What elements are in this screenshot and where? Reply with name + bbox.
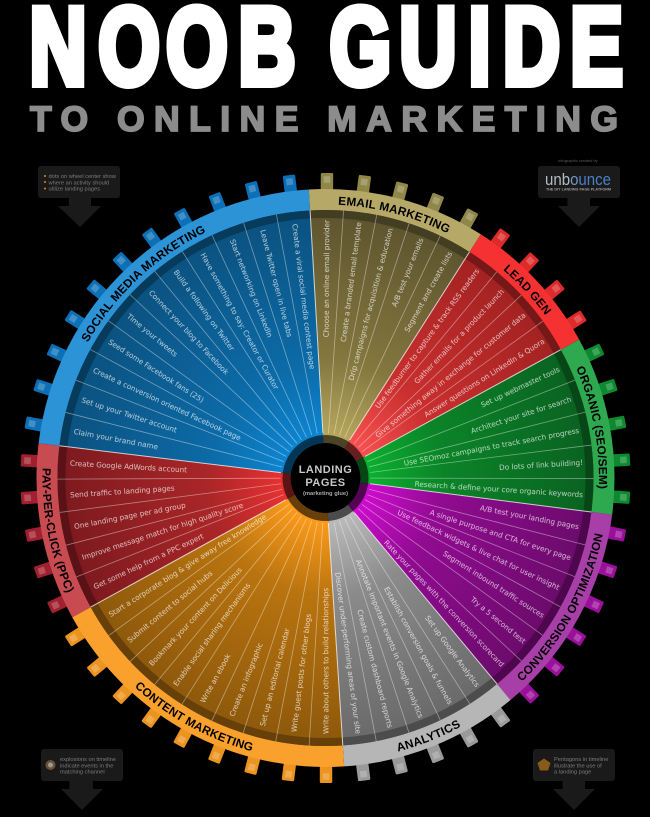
callout: unbounce credit: unbounce [545, 170, 611, 189]
callout: explosions legend: matching channel [60, 770, 105, 776]
content label: Set up an editorial calendar [258, 627, 292, 727]
lead gen label: Gather emails for a product launch [412, 287, 506, 386]
band: email [309, 189, 481, 252]
slice: social [59, 210, 326, 478]
callout: pentagons legend: Pentagons in timeline [554, 757, 608, 763]
content label: Submit content to social hubs [125, 569, 215, 645]
callout: pentagons legend: a landing page [554, 770, 591, 776]
social label: Time your tweets [124, 311, 180, 359]
organic label: Set up webmaster tools [479, 365, 561, 409]
panel: content marketing [65, 495, 344, 783]
social label: Build a following on Twitter [172, 268, 236, 352]
callout: pentagons legend: illustrate the use of [554, 763, 602, 769]
heading: analytics: ANALYTICS [398, 720, 460, 752]
social label: Start networking on LinkedIn [228, 238, 274, 339]
ppc label: Get some help from a PPC expert [92, 531, 205, 591]
band: ppc [36, 443, 91, 617]
band: analytics [343, 684, 510, 766]
analytics label: Annotate important events in Google Analytics [354, 558, 425, 719]
content label: Enable social sharing mechanisms [171, 581, 252, 688]
band: social [39, 189, 310, 446]
slice: lead gen [326, 252, 561, 478]
band: conversion [497, 512, 612, 700]
timeline tabs: social [24, 174, 297, 432]
ppc label: One landing page per ad group [73, 501, 187, 531]
callout: dots legend: utilize landing pages [48, 186, 100, 192]
panel: conversion optimization [348, 482, 626, 704]
hub title: PAGES [305, 477, 346, 489]
conversion label: Use feedback widgets & live chat for user insight [396, 508, 561, 592]
timeline tabs: email [321, 173, 478, 229]
ppc label: Send traffic to landing pages [70, 484, 175, 500]
heading: organic: ORGANIC (SEO/SEM) [577, 366, 608, 488]
callout: unbounce credit: infographic created by [558, 158, 598, 163]
heading: lead gen: LEAD GEN [504, 264, 552, 315]
panel: email marketing [308, 173, 481, 448]
social label: Set up your Twitter account [80, 395, 178, 435]
callout: pentagons legend [533, 749, 615, 810]
conversion label: Try a 5 second test [468, 594, 528, 646]
callout: explosions legend: explosions on timeline [60, 757, 116, 763]
content label: Create an infographic [227, 641, 265, 718]
analytics label: Establish conversion goals & funnels [382, 585, 455, 706]
center hub [286, 439, 364, 517]
slice: email [310, 210, 470, 478]
callout: explosions legend [41, 749, 123, 810]
timeline tabs: conversion [519, 526, 626, 704]
panel: lead gen [344, 228, 586, 462]
social label: Seed some Facebook fans (25) [107, 337, 206, 405]
timeline tabs: organic [584, 343, 630, 504]
analytics label: Set up Google Analytics [423, 614, 482, 689]
hub subtitle: (marketing glue) [303, 491, 348, 497]
slice: conversion [326, 478, 591, 684]
organic label: Architect your site for search [470, 395, 572, 435]
email label: Create a branded email template [339, 221, 363, 343]
content label: Write an ebook [198, 651, 233, 705]
heading: email: EMAIL MARKETING [338, 196, 450, 232]
content label: Write about others to build relationships [321, 588, 330, 734]
slice: ppc [57, 446, 326, 607]
subtitle: TO ONLINE MARKETING [30, 99, 618, 139]
hub title: LANDING [299, 464, 352, 476]
timeline tabs: ppc [21, 454, 68, 614]
panel: analytics [328, 504, 510, 782]
activity labels [70, 220, 583, 735]
social label: Create a viral social media contest page [290, 223, 317, 370]
callout: unbounce credit [538, 158, 620, 227]
timeline tabs: content [65, 627, 332, 783]
callout: unbounce credit: THE DIY LANDING PAGE PLATFORM [546, 186, 612, 192]
organic label: Research & define your core organic keywords [414, 479, 583, 499]
panel: social media marketing [24, 174, 324, 474]
conversion label: Segment inbound traffic sources [441, 549, 546, 620]
panel: pay-per-click [20, 443, 295, 618]
social label: Leave Twitter open in live tabs [258, 229, 294, 338]
lead gen label: Give something away in exchange for customer data [373, 311, 528, 440]
heading: social: SOCIAL MEDIA MARKETING [82, 226, 205, 342]
timeline tabs: lead gen [490, 228, 587, 330]
callout: dots legend [38, 166, 120, 227]
panel: organic [356, 340, 630, 515]
lead gen label: Use feedburner to capture & track RSS readers [373, 267, 481, 410]
social label: Create a conversion oriented Facebook page [92, 366, 243, 443]
analytics label: Discover under-performing areas of your site [333, 572, 363, 735]
email label: Segment and create lists [403, 250, 454, 334]
organic label: Use SEOmoz campaigns to track search progress [403, 426, 580, 468]
content label: Write guest posts for other blogs [289, 613, 313, 733]
band: organic [561, 340, 614, 515]
lead gen label: Answer questions on LinkedIn & Quora [422, 337, 546, 419]
band: content [72, 607, 344, 767]
band: lead gen [470, 234, 579, 350]
timeline tabs: analytics [356, 707, 511, 781]
social label: Connect your blog to Facebook [147, 288, 231, 377]
heading: content: CONTENT MARKETING [136, 682, 252, 750]
email label: Drip campaigns for acquisition & education [347, 227, 395, 382]
slice: content [91, 478, 343, 746]
content label: Start a corporate blog & give away free knowledge [107, 512, 269, 619]
ppc label: Create Google AdWords account [70, 459, 187, 474]
organic label: Do lots of link building! [499, 458, 583, 472]
callout: explosions legend: indicate events in the [60, 763, 113, 769]
content label: Bookmark your content on Delicious [147, 565, 244, 668]
email label: A/B test your emails [390, 237, 425, 308]
email label: Choose an online email provider [322, 220, 331, 337]
analytics label: Create custom dashboard reports [355, 609, 395, 729]
conversion label: A/B test your landing pages [479, 503, 580, 531]
ppc label: Improve message match for high quality score [81, 501, 245, 562]
wheel [20, 173, 630, 783]
slice: organic [326, 350, 593, 512]
heading: conversion: CONVERSION OPTIMIZATION [518, 533, 603, 680]
conversion label: A single purpose and CTA for every page [429, 508, 573, 562]
conversion label: Rate your pages with the conversion scorecard [382, 538, 506, 669]
slice: analytics [326, 478, 497, 745]
social label: Claim your brand name [73, 427, 159, 451]
callout: dots legend: dots on wheel center show [48, 174, 117, 180]
heading: ppc: PAY-PER-CLICK (PPC) [42, 468, 74, 592]
social label: Have something to say: Creator or Curator [199, 251, 281, 391]
callout: dots legend: where an activity should [48, 180, 109, 186]
